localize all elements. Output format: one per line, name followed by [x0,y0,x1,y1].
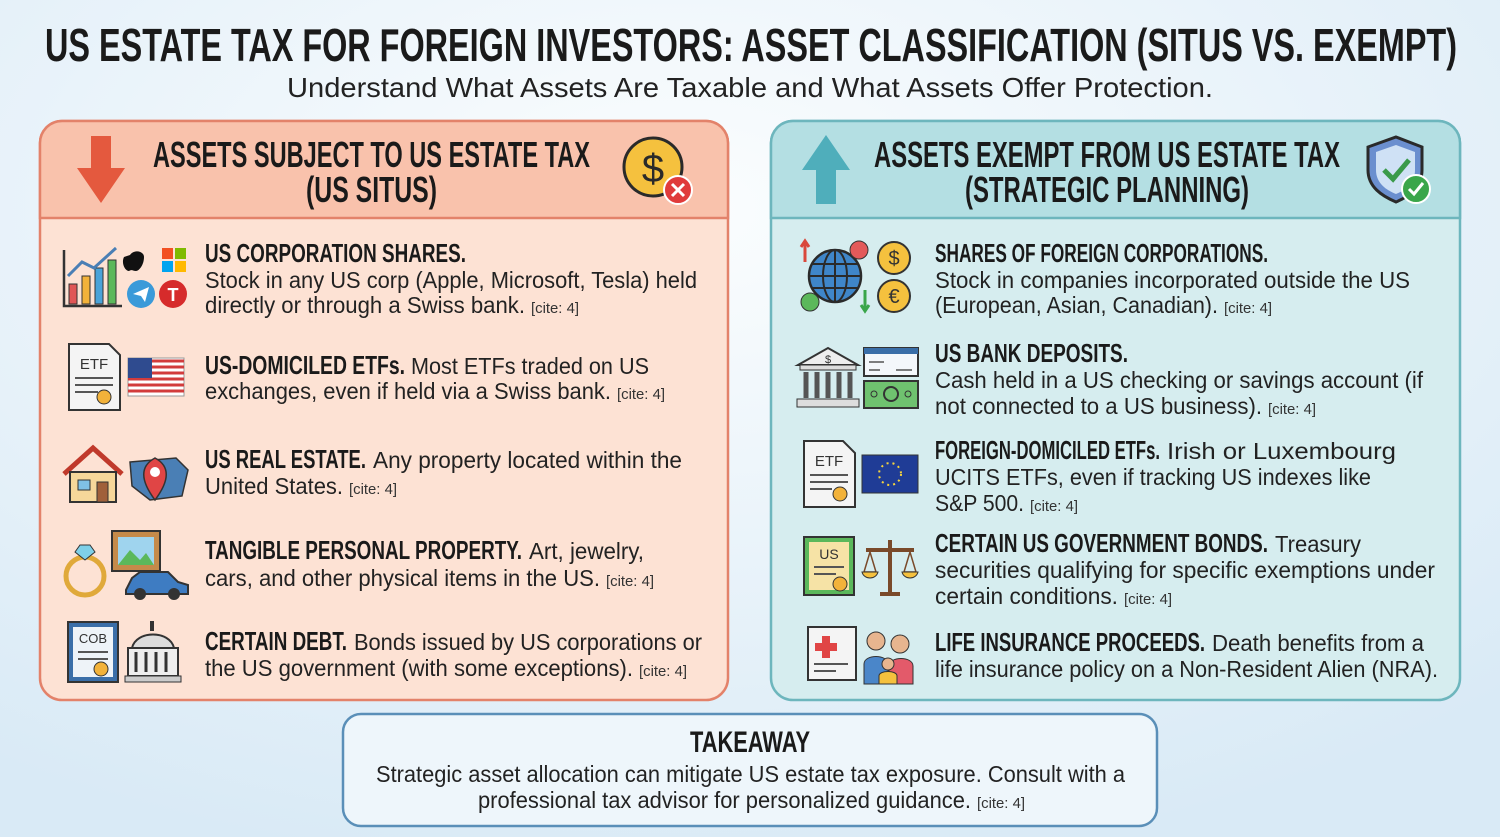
text: takeaway: [cite: 4] [977,795,1025,812]
icon: policy document and family [808,627,913,684]
item: certain debt: the US government (with some exceptions). [205,655,633,681]
icon: globe and coins: $ [888,248,900,270]
item: shares of foreign corporations: (European, Asian, Canadian). [935,292,1218,318]
icon: coin with x [624,138,692,204]
panel header: exempt [771,121,1460,218]
icon: ETF document and US flag [69,344,184,410]
heading: subject: ASSETS SUBJECT TO US ESTATE TAX [153,134,590,175]
item: certain US government bonds: certain conditions. [935,583,1118,609]
item: certain debt: [cite: 4] [639,663,687,680]
item: US bank deposits [797,338,1424,419]
item: foreign-domiciled ETFs: FOREIGN-DOMICILED ETFs. [935,435,1160,465]
icon: ring, picture, car [66,531,188,600]
item: foreign-domiciled ETFs: Irish or Luxembourg [1167,438,1396,464]
item: US-domiciled ETFs [69,344,665,410]
item: US corporation shares: directly or through a Swiss bank. [205,292,525,318]
panel header: subject [40,121,728,218]
icon: globe and coins [801,241,910,312]
item: certain debt [68,621,702,682]
icon: stocks and logos: T [168,285,178,305]
icon: US bond and scales: US [819,546,839,562]
item: foreign-domiciled ETFs [804,435,1396,516]
item: US bank deposits: not connected to a US business). [935,393,1262,419]
heading: exempt [874,134,1340,210]
item: US bank deposits: [cite: 4] [1268,401,1316,418]
icon: stocks and logos [64,248,187,308]
item: life insurance proceeds: Death benefits from a [1212,630,1424,656]
icon: bank and cash: $ [825,354,831,366]
item: foreign-domiciled ETFs: UCITS ETFs, even if tracking US indexes like [935,464,1371,490]
icon: up arrow [802,135,850,204]
heading: exempt: (STRATEGIC PLANNING) [965,169,1249,210]
item: foreign-domiciled ETFs: [cite: 4] [1030,498,1078,515]
icon: globe and coins: € [888,286,900,308]
item: certain US government bonds: securities qualifying for specific exemptions under [935,557,1435,583]
item: US real estate [64,444,682,502]
icon: coin with x: $ [642,147,664,191]
icon: ETF document and US flag: ETF [80,356,108,373]
item: US real estate: [cite: 4] [349,481,397,498]
panel: exempt from tax [771,121,1460,700]
item: tangible personal property: [cite: 4] [606,573,654,590]
item: life insurance proceeds: LIFE INSURANCE PROCEEDS. [935,627,1205,657]
item: shares of foreign corporations: SHARES OF FOREIGN CORPORATIONS. [935,238,1268,268]
subtitle: Understand What Assets Are Taxable and What Assets Offer Protection. [287,72,1213,103]
heading: takeaway: TAKEAWAY [690,726,810,759]
icon: ETF document and EU flag: ETF [815,453,843,470]
item: life insurance proceeds [808,627,1438,684]
icon: house and map pin [64,448,188,502]
text: takeaway: professional tax advisor for personalized guidance. [478,787,971,813]
item: tangible personal property: TANGIBLE PERSONAL PROPERTY. [205,535,522,565]
item: shares of foreign corporations: [cite: 4] [1224,300,1272,317]
item: US corporation shares [64,238,697,318]
item: shares of foreign corporations: Stock in companies incorporated outside the US [935,267,1410,293]
item: tangible personal property [66,531,654,600]
item: US real estate: Any property located within the [373,447,682,473]
item: US-domiciled ETFs: Most ETFs traded on US [411,353,649,379]
icon: bank and cash [797,348,918,408]
panel: subject to tax [40,121,728,700]
icon: US bond and scales [804,537,918,595]
item: US real estate: United States. [205,473,343,499]
item: US-domiciled ETFs: [cite: 4] [617,386,665,403]
item: US bank deposits: US BANK DEPOSITS. [935,338,1128,368]
item: US-domiciled ETFs: exchanges, even if held via a Swiss bank. [205,378,611,404]
heading: subject [153,134,590,210]
item: US corporation shares: Stock in any US corp (Apple, Microsoft, Tesla) held [205,267,697,293]
item: shares of foreign corporations [801,238,1410,318]
item: certain US government bonds: Treasury [1275,531,1361,557]
icon: COB bond and capitol: COB [79,631,107,646]
item: certain US government bonds [804,528,1435,609]
item: US-domiciled ETFs: US-DOMICILED ETFs. [205,350,405,380]
icon: shield check [1368,137,1430,203]
item: foreign-domiciled ETFs: S&P 500. [935,490,1024,516]
text: takeaway [376,761,1125,813]
text: takeaway: Strategic asset allocation can mitigate US estate tax exposure. Consult with a [376,761,1125,787]
icon: down arrow [77,136,125,203]
item: certain debt: Bonds issued by US corporations or [354,629,702,655]
panel: takeaway [343,714,1157,826]
heading: subject: (US SITUS) [306,169,437,210]
item: certain debt: CERTAIN DEBT. [205,626,347,656]
item: tangible personal property: Art, jewelry, [529,538,644,564]
icon: ETF document and EU flag [804,441,918,507]
item: US real estate: US REAL ESTATE. [205,444,366,474]
item: life insurance proceeds: life insurance policy on a Non-Resident Alien (NRA). [935,656,1438,682]
item: US corporation shares: [cite: 4] [531,300,579,317]
item: certain US government bonds: CERTAIN US GOVERNMENT BONDS. [935,528,1268,558]
icon: COB bond and capitol [68,621,181,682]
item: US corporation shares: US CORPORATION SHARES. [205,238,466,268]
item: US bank deposits: Cash held in a US checking or savings account (if [935,367,1424,393]
item: tangible personal property: cars, and other physical items in the US. [205,565,600,591]
item: certain US government bonds: [cite: 4] [1124,591,1172,608]
